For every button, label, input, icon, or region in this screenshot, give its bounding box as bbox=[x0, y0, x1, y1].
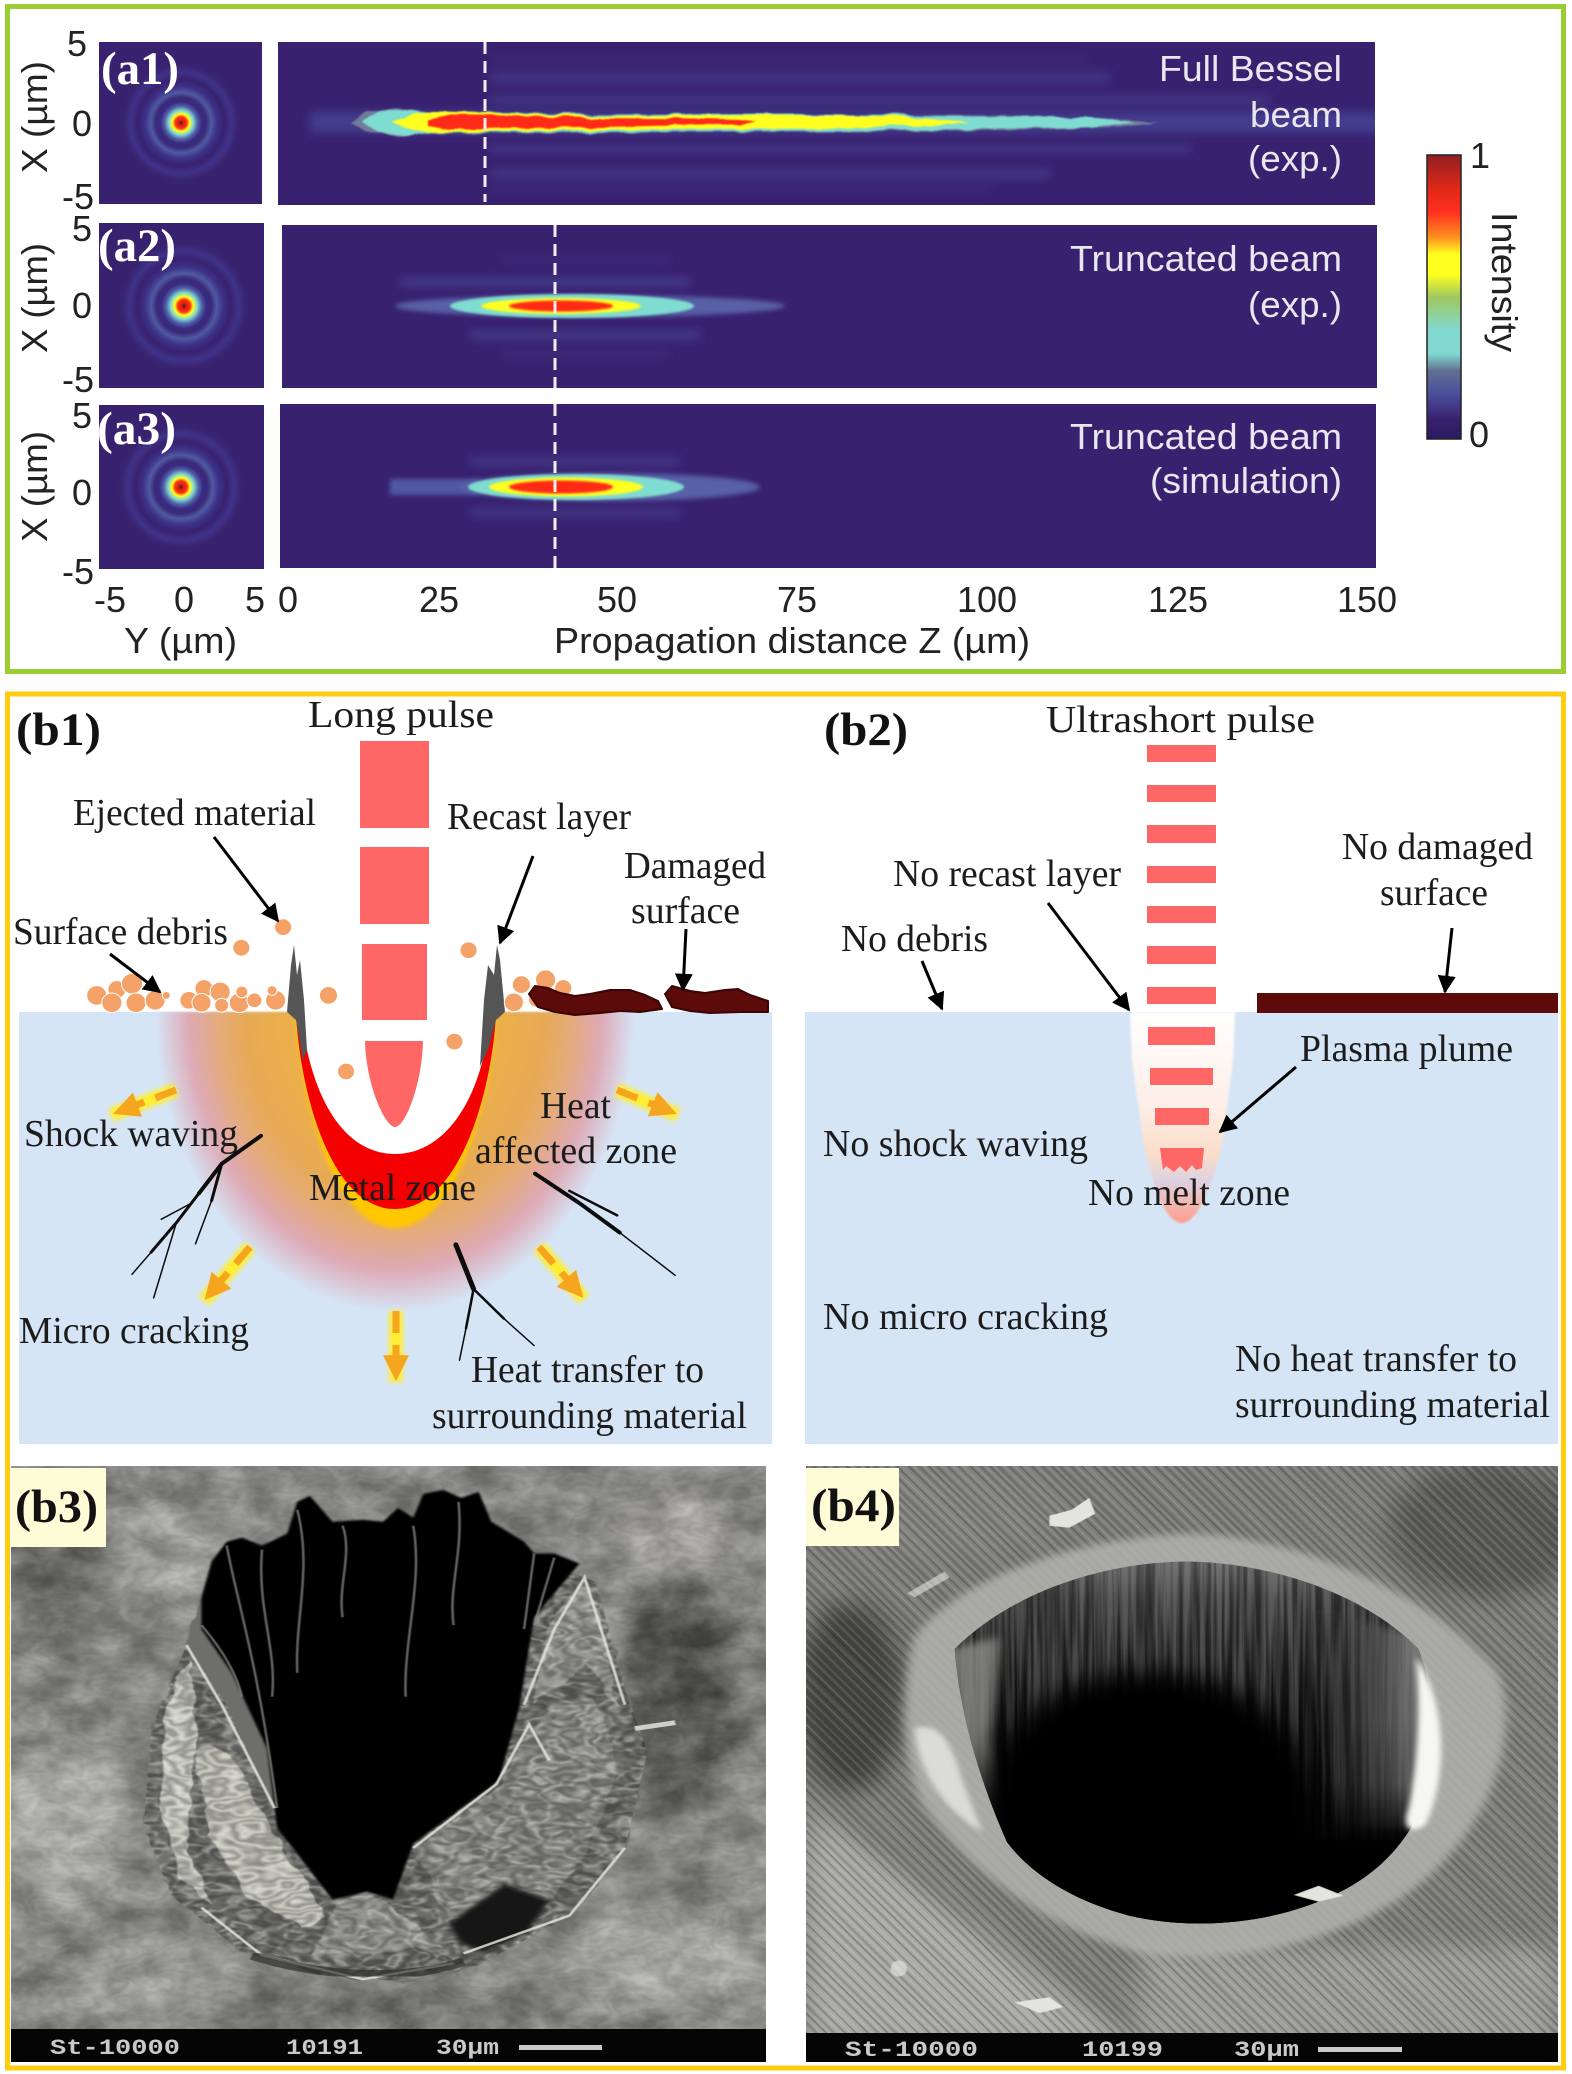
b1 labels: Micro cracking bbox=[19, 1310, 249, 1352]
tick labels on vertical axes: 5 bbox=[72, 208, 92, 249]
b2 labels: No debris bbox=[841, 918, 988, 960]
b1 labels: Heat bbox=[540, 1085, 611, 1127]
sub-panel labels a1 a2 a3 bbox=[97, 43, 179, 455]
b2 labels: (b2) bbox=[824, 704, 908, 756]
recast layer spikes bbox=[287, 945, 505, 1066]
b1 labels: Damaged bbox=[624, 845, 766, 887]
a3 simulated beam map bbox=[280, 404, 1376, 568]
b1 labels: (b1) bbox=[16, 704, 101, 756]
panel: laser drilling comparison (b) bbox=[5, 694, 1572, 2068]
heat affected zone bbox=[155, 1012, 635, 1312]
colour bar legend: 1 bbox=[1470, 135, 1490, 176]
beam captions: Full Bessel bbox=[1159, 48, 1342, 89]
b2 labels: Ultrashort pulse bbox=[1046, 699, 1315, 741]
b4 scale bar strip bbox=[806, 2033, 1558, 2063]
beam captions: Truncated beam bbox=[1070, 238, 1342, 279]
b3 scale bar strip: 10191 bbox=[286, 2036, 363, 2061]
horizontal tick labels: 100 bbox=[957, 579, 1017, 620]
horizontal tick labels: 50 bbox=[597, 579, 637, 620]
b2 ultrashort pulse schematic bbox=[805, 699, 1558, 1444]
surface debris flecks bbox=[891, 1498, 1344, 2013]
surface shading bbox=[5, 1454, 781, 2025]
b3 scale bar strip: St-10000 bbox=[50, 2036, 180, 2061]
bright wall crescents bbox=[915, 1657, 1441, 1832]
tick labels on vertical axes: -5 bbox=[62, 176, 94, 217]
b2 labels: No damaged bbox=[1342, 826, 1533, 868]
b2 labels: No recast layer bbox=[893, 853, 1121, 895]
gold melt glow bbox=[296, 1014, 496, 1228]
dark cavity bbox=[202, 1490, 580, 1900]
cavity streaks bbox=[202, 1502, 554, 1808]
b3 label: (b3) bbox=[15, 1481, 98, 1533]
tick labels on vertical axes: -5 bbox=[62, 551, 94, 592]
rim dark band bbox=[252, 1955, 464, 1974]
damaged surface bbox=[529, 986, 768, 1015]
b1 labels: Metal zone bbox=[309, 1167, 476, 1209]
hole bbox=[954, 1562, 1428, 1924]
rim highlights bbox=[186, 1577, 675, 1979]
rim ring bbox=[905, 1534, 1506, 1957]
tick labels on vertical axes: 5 bbox=[72, 395, 92, 436]
b1 labels: affected zone bbox=[475, 1130, 677, 1172]
beam captions: Truncated beam bbox=[1070, 416, 1342, 457]
horizontal tick labels: 150 bbox=[1337, 579, 1397, 620]
heat transfer arrows bbox=[111, 1090, 678, 1382]
horizontal tick labels: -5 bbox=[94, 579, 126, 620]
b3 SEM micrograph: long pulse hole bbox=[5, 1454, 781, 2062]
a2 cross-section spot bbox=[99, 223, 264, 388]
panel: beam intensity maps (a) bbox=[8, 6, 1564, 672]
beam captions bbox=[1070, 48, 1342, 501]
b1 long pulse schematic bbox=[13, 694, 772, 1444]
tick labels on vertical axes bbox=[62, 23, 94, 592]
a3 cross-section spot bbox=[99, 405, 264, 569]
surface speckle bbox=[11, 1466, 766, 2029]
crater walls and cavity bbox=[144, 1554, 648, 1981]
horizontal tick labels: 75 bbox=[777, 579, 817, 620]
lower right pocket bbox=[448, 1884, 549, 1952]
b2 labels bbox=[823, 699, 1550, 1426]
b4 scale bar strip: St-10000 bbox=[845, 2038, 978, 2063]
b1 labels: Long pulse bbox=[308, 694, 494, 736]
b1 labels: Ejected material bbox=[73, 792, 316, 834]
b2 labels: No micro cracking bbox=[823, 1296, 1108, 1338]
b2 labels: surrounding material bbox=[1235, 1384, 1550, 1426]
b1 labels: surface bbox=[631, 890, 740, 932]
vertical axis titles: X (µm) bbox=[14, 431, 55, 542]
a1 full Bessel beam propagation map bbox=[278, 42, 1385, 205]
melt crescent bbox=[296, 1014, 496, 1209]
horizontal tick labels: 125 bbox=[1148, 579, 1208, 620]
tick labels on vertical axes: 0 bbox=[72, 472, 92, 513]
b4 scale bar strip: 10199 bbox=[1082, 2038, 1163, 2063]
sub-panel labels a1 a2 a3: (a2) bbox=[98, 220, 176, 272]
b1 labels: Shock waving bbox=[24, 1113, 238, 1155]
b2 labels: No shock waving bbox=[823, 1123, 1088, 1165]
b3 scale bar strip bbox=[11, 2029, 766, 2062]
polish scratches bbox=[806, 1466, 1558, 2062]
surface shading bbox=[795, 1462, 1572, 2047]
b1 labels: Surface debris bbox=[13, 911, 228, 953]
b4 SEM micrograph: ultrashort pulse hole bbox=[795, 1462, 1572, 2063]
vertical axis titles: X (µm) bbox=[14, 61, 55, 173]
colour bar legend: 0 bbox=[1469, 414, 1489, 455]
vertical axis titles: X (µm) bbox=[14, 243, 55, 353]
b4 label: (b4) bbox=[811, 1480, 896, 1532]
damaged surface strip bbox=[1257, 993, 1558, 1013]
horizontal tick labels bbox=[94, 579, 1397, 620]
sub-panel labels a1 a2 a3: (a1) bbox=[101, 43, 179, 95]
vertical axis titles bbox=[14, 61, 55, 542]
b4 scale bar strip: 30µm bbox=[1234, 2038, 1299, 2063]
material block bbox=[805, 1012, 1558, 1444]
b4 label bbox=[806, 1468, 899, 1546]
beam captions: (exp.) bbox=[1248, 284, 1342, 325]
b2 labels: No heat transfer to bbox=[1235, 1338, 1517, 1380]
beam captions: (exp.) bbox=[1248, 138, 1342, 179]
long pulse bars bbox=[360, 741, 429, 1127]
b1 labels: Heat transfer to bbox=[471, 1349, 704, 1391]
tick labels on vertical axes: -5 bbox=[62, 359, 94, 400]
tick labels on vertical axes: 5 bbox=[67, 23, 87, 64]
horizontal axis titles bbox=[124, 620, 1030, 661]
crater void bbox=[298, 1010, 494, 1154]
b1 labels: Recast layer bbox=[447, 796, 631, 838]
beam captions: (simulation) bbox=[1150, 460, 1342, 501]
b1 labels bbox=[13, 694, 766, 1437]
beam captions: beam bbox=[1250, 94, 1342, 135]
horizontal tick labels: 0 bbox=[278, 579, 298, 620]
ultrashort pulse train bbox=[1147, 745, 1216, 1172]
b1 labels: surrounding material bbox=[432, 1395, 747, 1437]
focus dashed markers bbox=[485, 42, 555, 568]
b2 labels: No melt zone bbox=[1088, 1172, 1290, 1214]
b3 label bbox=[11, 1468, 106, 1547]
tick labels on vertical axes: 0 bbox=[72, 285, 92, 326]
plasma plume channel bbox=[1130, 1012, 1235, 1223]
tick labels on vertical axes: 0 bbox=[72, 103, 92, 144]
horizontal axis titles: Y (µm) bbox=[124, 620, 237, 661]
colour bar legend: Intensity bbox=[1484, 212, 1525, 352]
callout arrows bbox=[110, 837, 686, 992]
b3 scale bar strip: 30µm bbox=[436, 2036, 499, 2061]
a1 cross-section spot bbox=[99, 42, 262, 204]
a2 truncated beam map bbox=[282, 225, 1377, 388]
debris particles bbox=[87, 919, 572, 1080]
micro cracks bbox=[132, 1136, 675, 1360]
b2 labels: surface bbox=[1380, 872, 1488, 914]
horizontal tick labels: 0 bbox=[174, 579, 194, 620]
material block bbox=[19, 1012, 772, 1444]
horizontal tick labels: 25 bbox=[419, 579, 459, 620]
wall texture bbox=[144, 1573, 648, 1981]
colour bar legend bbox=[1427, 135, 1525, 455]
horizontal tick labels: 5 bbox=[245, 579, 265, 620]
sub-panel labels a1 a2 a3: (a3) bbox=[97, 403, 176, 455]
b2 labels: Plasma plume bbox=[1300, 1028, 1513, 1070]
horizontal axis titles: Propagation distance Z (µm) bbox=[554, 620, 1030, 661]
callout arrows bbox=[922, 903, 1452, 1132]
